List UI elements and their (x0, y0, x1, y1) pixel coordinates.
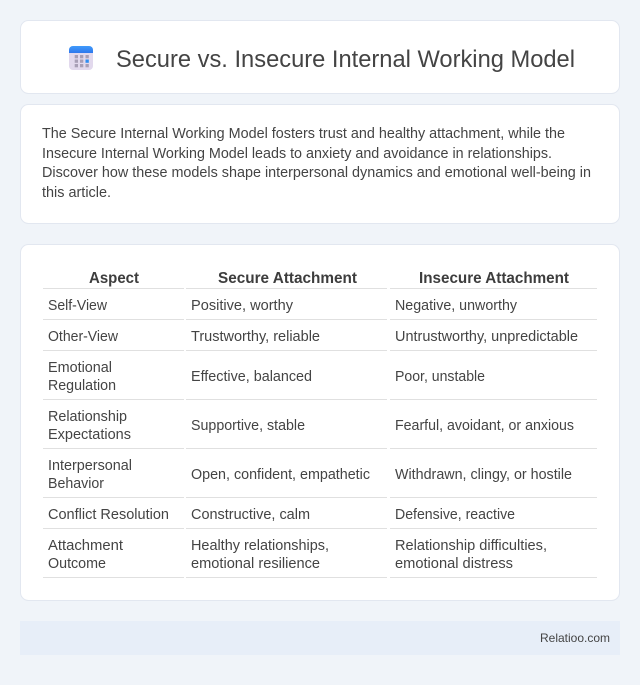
text block: introduction (42, 126, 591, 201)
row: interpersonal behavior (48, 458, 572, 492)
row: attachment outcome: Relationship difficulties, (395, 538, 547, 554)
row: emotional regulation: Effective, balanced (191, 369, 312, 385)
panel: comparison table (20, 244, 620, 600)
text block: introduction: The Secure Internal Working Model fosters trust and healthy attachment, while the (42, 126, 565, 142)
text block: introduction: Discover how these models shape interpersonal dynamics and emotional well-being in (42, 165, 591, 181)
row: interpersonal behavior: Interpersonal (48, 458, 132, 474)
row: other-view: Other-View (48, 329, 119, 345)
row: conflict resolution (48, 507, 515, 523)
row: other-view (48, 329, 578, 345)
row: other-view: Untrustworthy, unpredictable (395, 329, 578, 345)
row: relationship expectations (48, 409, 574, 443)
table header: Aspect (89, 270, 140, 287)
row: attachment outcome: Outcome (48, 556, 106, 572)
row: self-view: Negative, unworthy (395, 298, 518, 314)
title: Secure vs. Insecure Internal Working Model (116, 46, 575, 73)
panel: introduction (20, 104, 620, 224)
row: interpersonal behavior: Withdrawn, clingy, or hostile (395, 467, 572, 483)
row: attachment outcome: Attachment (48, 538, 123, 554)
row: attachment outcome: emotional distress (395, 556, 513, 572)
row: relationship expectations: Expectations (48, 427, 131, 443)
text block: introduction: this article. (42, 185, 111, 201)
row: interpersonal behavior: Open, confident, empathetic (191, 467, 370, 483)
table header: Insecure Attachment (419, 270, 570, 287)
row: relationship expectations: Supportive, stable (191, 418, 305, 434)
footer: Relatioo.com (540, 631, 610, 645)
row: conflict resolution: Constructive, calm (191, 507, 310, 523)
table header (89, 270, 570, 287)
table header: Secure Attachment (218, 270, 358, 287)
row: emotional regulation (48, 360, 485, 394)
row: self-view: Self-View (48, 298, 108, 314)
row: attachment outcome: emotional resilience (191, 556, 320, 572)
icon: calendar (69, 46, 93, 70)
row: emotional regulation: Emotional (48, 360, 112, 376)
row: conflict resolution: Conflict Resolution (48, 507, 169, 523)
text block: introduction: Insecure Internal Working Model leads to anxiety and avoidance in relationships. (42, 146, 552, 162)
row: emotional regulation: Regulation (48, 378, 116, 394)
row: conflict resolution: Defensive, reactive (395, 507, 515, 523)
row: relationship expectations: Fearful, avoidant, or anxious (395, 418, 574, 434)
row: other-view: Trustworthy, reliable (191, 329, 320, 345)
row: interpersonal behavior: Behavior (48, 476, 104, 492)
row: self-view: Positive, worthy (191, 298, 294, 314)
footer (20, 621, 620, 655)
row: attachment outcome: Healthy relationships, (191, 538, 329, 554)
row: emotional regulation: Poor, unstable (395, 369, 485, 385)
row: self-view (48, 298, 518, 314)
row: relationship expectations: Relationship (48, 409, 127, 425)
panel: title card (20, 20, 620, 94)
row: attachment outcome (48, 538, 547, 572)
